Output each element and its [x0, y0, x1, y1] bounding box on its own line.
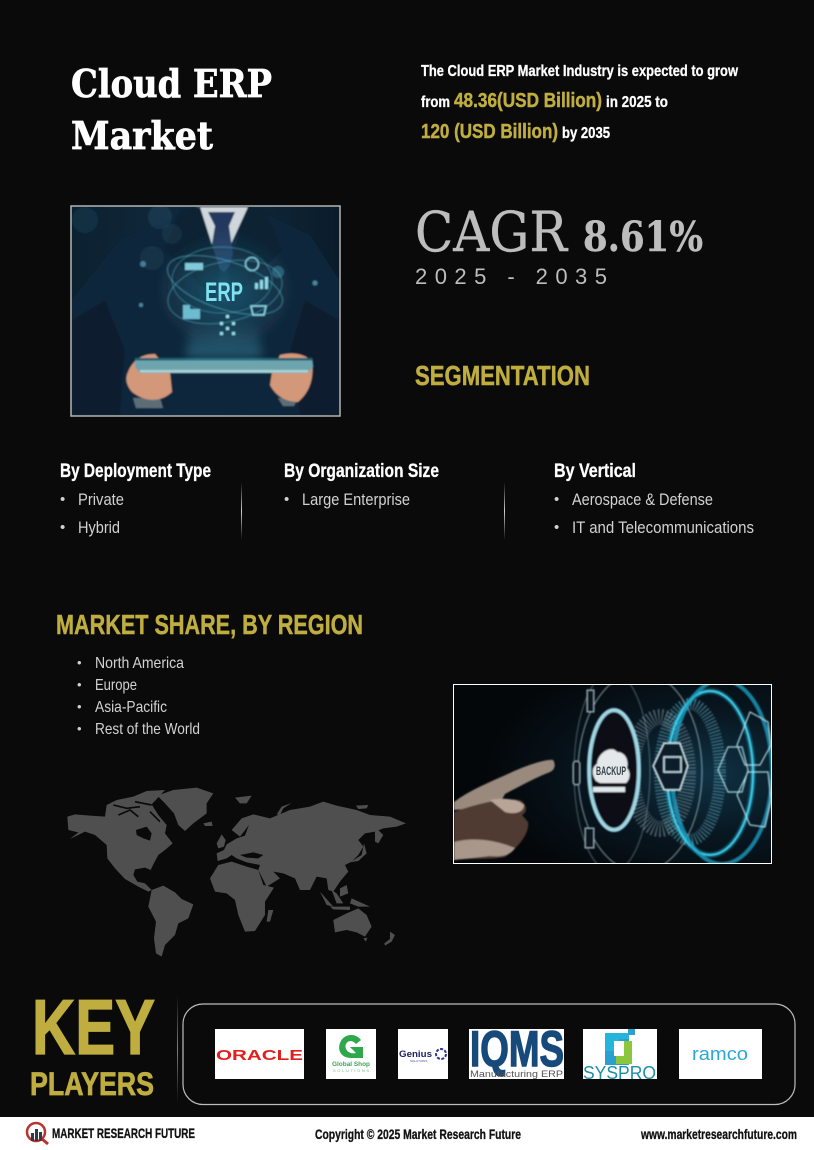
Hudson Bay and arctic channels — [136, 827, 152, 841]
hologram glow — [160, 231, 288, 340]
region list: Asia-Pacific — [95, 699, 167, 716]
CAGR period: 2025 - 2035 — [415, 264, 607, 289]
hands — [126, 354, 172, 400]
region list — [77, 655, 200, 738]
sleeves — [133, 398, 163, 408]
region list: • — [77, 699, 82, 714]
segment: by organization size: Large Enterprise — [302, 490, 410, 509]
segment: by vertical: • — [554, 519, 559, 536]
orbit rings — [166, 254, 284, 316]
logo: IQMS: Manufacturing ERP — [470, 1069, 563, 1079]
progress bar — [593, 787, 625, 792]
segment: by deployment type — [60, 461, 211, 537]
hand — [454, 760, 555, 810]
suit — [72, 207, 339, 415]
radial hatch bands — [632, 717, 688, 829]
cyan neon rings — [667, 691, 753, 855]
region list: Europe — [95, 677, 137, 694]
region list: North America — [95, 655, 184, 672]
key players panel — [183, 1004, 795, 1104]
region list: Rest of the World — [95, 721, 200, 738]
outer HUD arcs — [578, 672, 702, 872]
ERP hologram label: ERP — [205, 277, 243, 307]
segment: by deployment type: Private — [78, 490, 124, 509]
inland seas — [240, 852, 263, 858]
heading: key players: PLAYERS — [30, 1066, 154, 1102]
CAGR figure: 8.61% — [583, 213, 703, 261]
copyright: Copyright © 2025 Market Research Future — [315, 1127, 521, 1142]
heading: market share by region: MARKET SHARE, BY REGION — [56, 609, 363, 640]
CAGR figure: CAGR — [415, 200, 568, 264]
cloud — [593, 749, 630, 783]
logo: Genius Solutions: SOLUTIONS — [410, 1059, 427, 1063]
market growth summary: in 2025 to — [606, 94, 668, 111]
market growth summary: 120 (USD Billion) — [421, 121, 558, 143]
region list: • — [77, 677, 82, 692]
segment: by organization size: By Organization Size — [284, 461, 439, 482]
backup label: BACKUP — [596, 764, 626, 778]
segment: by organization size — [284, 461, 439, 509]
market growth summary: 48.36(USD Billion) — [454, 90, 602, 112]
segment: by vertical: • — [554, 491, 559, 508]
backup ring — [589, 710, 639, 830]
segment: by deployment type: • — [60, 491, 65, 508]
segment: by deployment type: • — [60, 519, 65, 536]
hologram icons — [185, 263, 203, 270]
logo: IQMS: IQMS — [470, 1021, 564, 1077]
world map — [67, 788, 406, 957]
logo: SYSPRO — [583, 1029, 657, 1083]
region list: • — [77, 721, 82, 736]
segment: by vertical: IT and Telecommunications — [572, 518, 754, 537]
logo: Global Shop Solutions — [326, 1029, 376, 1079]
hexagons — [718, 712, 771, 827]
segment: by deployment type: By Deployment Type — [60, 461, 211, 482]
small HUD icons — [573, 761, 580, 785]
market growth summary — [421, 63, 738, 143]
segment: by organization size: • — [284, 491, 289, 508]
region list: • — [77, 655, 82, 670]
market growth summary: The Cloud ERP Market Industry is expected to grow — [421, 63, 738, 80]
logo: Genius Solutions: Genius — [399, 1049, 432, 1059]
hologram beam — [186, 320, 262, 357]
logo: SYSPRO: SYSPRO — [583, 1063, 656, 1083]
title — [71, 61, 272, 158]
logo: Oracle: ORACLE — [216, 1047, 303, 1064]
logo: Global Shop Solutions: Global Shop — [332, 1062, 370, 1068]
icon: magnifier logo — [27, 1123, 48, 1144]
heading: segmentation: SEGMENTATION — [415, 360, 590, 391]
logo: Oracle — [215, 1029, 304, 1079]
logo: ramco: ramco — [692, 1044, 748, 1064]
market growth summary: from — [421, 94, 450, 111]
CAGR figure — [415, 200, 703, 264]
heading: key players — [30, 983, 155, 1102]
segment: by vertical: Aerospace & Defense — [572, 490, 713, 509]
image: cloud backup interface — [454, 672, 772, 872]
logo: ramco — [679, 1029, 762, 1079]
segment: by vertical — [554, 461, 754, 537]
title: Cloud ERP — [71, 61, 272, 106]
footer — [0, 1117, 814, 1150]
logo: Genius Solutions — [398, 1029, 448, 1079]
tablet — [135, 358, 313, 373]
market growth summary: by 2035 — [562, 125, 610, 142]
segment: by deployment type: Hybrid — [78, 518, 120, 537]
segment: by vertical: By Vertical — [554, 461, 636, 482]
image: ERP businessman hologram — [71, 205, 340, 416]
heading: key players: KEY — [32, 983, 155, 1071]
logo: Global Shop Solutions: SOLUTIONS — [333, 1068, 369, 1073]
footer brand: MARKET RESEARCH FUTURE — [52, 1126, 195, 1141]
title: Market — [71, 113, 213, 158]
